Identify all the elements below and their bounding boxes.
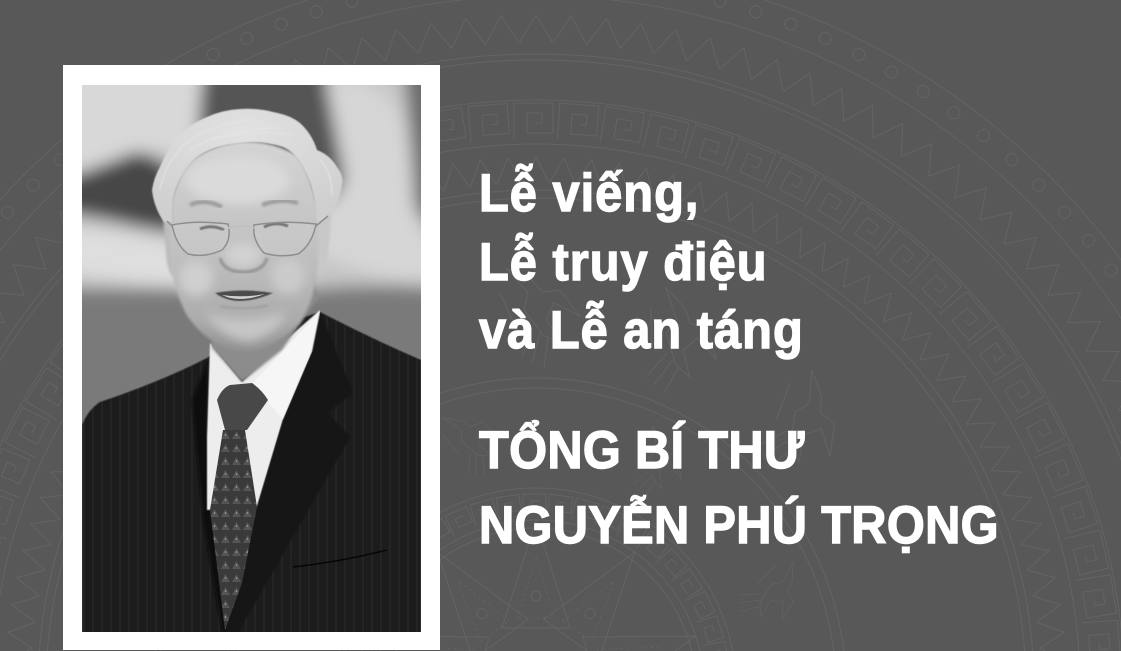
nose [225,243,261,267]
glasses [167,216,328,256]
heading: name and title: TỔNG BÍ THƯ [479,421,805,480]
suit [82,312,421,640]
mouth [215,290,273,301]
portrait frame: white border with photo [63,65,440,650]
brows and eyes [190,201,298,207]
face [170,142,319,352]
tie [210,430,257,630]
heading: ceremony names [478,163,804,360]
ears [319,216,330,254]
neck [212,275,318,382]
collar right [253,311,321,420]
hair [152,109,342,222]
heading: name and title [478,420,999,555]
heading: ceremony names: Lễ truy điệu [479,232,767,292]
right lapel [225,312,353,632]
heading: name and title: NGUYỄN PHÚ TRỌNG [479,496,999,555]
shirt [207,310,320,510]
left lapel shadow [192,362,226,632]
heading: ceremony names: Lễ viếng, [479,164,699,223]
heading: ceremony names: và Lễ an táng [479,301,804,360]
